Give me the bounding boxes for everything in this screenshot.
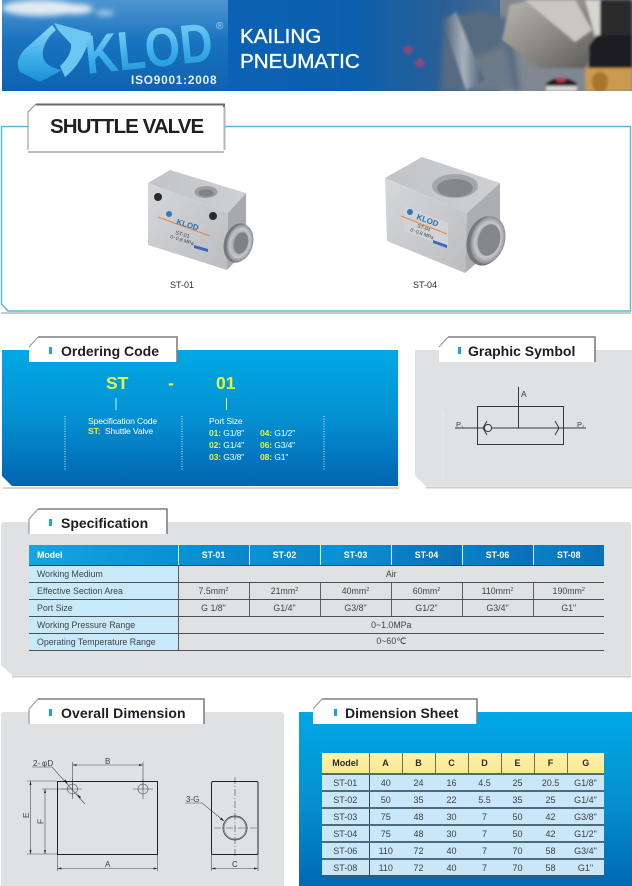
dimension table: 75 [381, 828, 391, 838]
dimension table: 110 [379, 862, 393, 872]
caption: ST-04: ST-04 [413, 280, 437, 290]
port size description: Port Size [209, 416, 243, 426]
heading: Dimension Sheet [345, 705, 459, 721]
specification table: ST-01 [202, 550, 225, 560]
dimension table: 72 [413, 846, 424, 856]
dimension table: 58 [545, 846, 556, 856]
company name [240, 25, 360, 72]
company logo: KLOD [82, 11, 216, 86]
specification code description: Specification Code [88, 416, 157, 426]
company logo [18, 11, 224, 86]
dimension table: 42 [545, 812, 556, 822]
pneumatic symbol diagram: 1 [461, 424, 464, 429]
specification table: 60mm2 [413, 586, 440, 596]
dimension drawing: 2- [33, 759, 40, 768]
port size description: 01: G1/8" [209, 428, 244, 438]
specification table: Model [37, 550, 62, 560]
dimension drawing: D [48, 759, 54, 768]
dimension table: ST-03 [333, 812, 357, 822]
dimension table: Model [332, 758, 358, 768]
code: 01: 01 [216, 373, 235, 393]
accent mark [49, 709, 52, 716]
pneumatic symbol diagram: 2 [582, 424, 585, 429]
company name: KAILING [240, 25, 321, 48]
dimension drawing: B [105, 757, 110, 766]
dimension drawing [22, 757, 258, 871]
heading: Specification [61, 515, 148, 531]
dimension table: ST-01 [333, 778, 357, 788]
dimension table: 24 [413, 778, 424, 788]
panel background [299, 712, 632, 886]
dimension table: 20.5 [542, 778, 559, 788]
dimension table: ST-06 [333, 846, 357, 856]
dimension table: ST-08 [333, 862, 357, 872]
section tab [28, 508, 168, 534]
dimension table: 50 [381, 794, 391, 804]
specification table: ST-03 [344, 550, 367, 560]
specification code description [88, 416, 157, 436]
specification table: G1/4" [273, 602, 296, 612]
dimension table: G1" [578, 862, 593, 872]
specification table: Operating Temperature Range [37, 636, 156, 646]
dimension drawing: 3-G [186, 795, 199, 804]
specification table: G1/2" [415, 602, 438, 612]
code: dash: - [168, 373, 174, 393]
dimension table: 25 [545, 794, 556, 804]
dimension table: 72 [413, 862, 424, 872]
specification table [29, 545, 604, 651]
dimension table: G3/8" [574, 812, 597, 822]
specification table: 40mm2 [342, 586, 369, 596]
port size description: 06: G3/4" [260, 440, 295, 450]
dimension table [322, 753, 604, 877]
panel: specification [1, 508, 631, 678]
heading: SHUTTLE VALVE [50, 115, 203, 138]
panel: ordering code [2, 336, 399, 489]
heading: Ordering Code [61, 343, 159, 359]
dimension table: G [582, 758, 589, 768]
dimension table: 25 [512, 778, 522, 788]
dimension table: 110 [379, 846, 393, 856]
accent mark [458, 347, 461, 354]
panel: overall dimension [1, 698, 284, 886]
dimension drawing: A [105, 860, 111, 869]
port size description: 02: G1/4" [209, 440, 244, 450]
dimension table: D [481, 758, 488, 768]
panel: product photos [0, 104, 632, 314]
dimension table: 58 [545, 862, 556, 872]
dimension table: 7 [482, 812, 487, 822]
specification table: 0~1.0MPa [371, 620, 411, 630]
dimension table: 70 [512, 862, 522, 872]
dimension table: 7 [482, 846, 487, 856]
dimension table: 7 [482, 862, 487, 872]
product: ST-04 valve photo: ST-04 [416, 223, 431, 234]
panel frame [0, 126, 632, 314]
pneumatic symbol diagram: A [521, 389, 527, 399]
header banner [2, 0, 632, 91]
accent mark [334, 709, 337, 716]
section tab [28, 698, 205, 724]
pneumatic symbol diagram [455, 387, 586, 445]
specification table: 21mm2 [271, 586, 298, 596]
specification table: G1" [561, 602, 576, 612]
dimension table: 4.5 [478, 778, 491, 788]
banner background photo collage [2, 0, 632, 91]
dimension table: 30 [446, 812, 456, 822]
dimension table: 16 [446, 778, 456, 788]
dimension table: 30 [446, 828, 456, 838]
dimension table: A [382, 758, 389, 768]
dimension table: 22 [446, 794, 456, 804]
dimension table: 48 [413, 812, 424, 822]
dimension table: G1/4" [574, 794, 597, 804]
product: ST-04 valve photo [385, 157, 506, 273]
panel: graphic symbol [415, 336, 632, 488]
company name: PNEUMATIC [240, 50, 360, 72]
accent mark [49, 347, 52, 354]
panel background [415, 350, 632, 488]
dimension table: 35 [413, 794, 424, 804]
product: ST-01 valve photo [148, 170, 254, 270]
dimension table: ST-04 [333, 828, 357, 838]
heading: Graphic Symbol [468, 343, 575, 359]
section tab [28, 336, 178, 362]
dimension drawing: C [232, 860, 238, 869]
pneumatic symbol diagram: P [456, 420, 461, 429]
heading: Overall Dimension [61, 705, 186, 721]
specification table: ST-08 [557, 550, 580, 560]
panel: dimension sheet [299, 698, 632, 886]
port size description: 08: G1" [260, 452, 288, 462]
product: ST-01 valve photo: ST-01 [174, 230, 190, 240]
specification table: 110mm2 [482, 586, 513, 596]
dimension table: 50 [512, 828, 522, 838]
port size description [209, 416, 295, 462]
product: ST-04 valve photo: KLOD [415, 212, 440, 229]
specification table: Port Size [37, 602, 73, 612]
specification table: 7.5mm2 [199, 586, 228, 596]
dimension drawing: F [36, 819, 46, 824]
panel background [2, 350, 399, 489]
pneumatic symbol diagram: P [577, 420, 582, 429]
specification table: Effective Section Area [37, 586, 123, 596]
dimension table: G1/2" [574, 828, 597, 838]
specification table: Working Pressure Range [37, 620, 135, 630]
dimension drawing: φ [42, 759, 47, 768]
dimension table: 5.5 [478, 794, 491, 804]
dimension table: E [514, 758, 520, 768]
product: ST-04 valve photo: 0~0.8 MPa [409, 227, 434, 241]
section tab [438, 336, 596, 362]
section tab [312, 698, 478, 724]
dimension table: 7 [482, 828, 487, 838]
dimension table: B [415, 758, 422, 768]
title tab [28, 104, 226, 153]
specification table: G3/8" [344, 602, 367, 612]
specification table: 190mm2 [553, 586, 585, 596]
dimension table: 75 [381, 812, 391, 822]
dimension table: 50 [512, 812, 522, 822]
dimension table: G1/8" [574, 778, 597, 788]
specification table: G 1/8" [201, 602, 226, 612]
specification table: Air [386, 568, 397, 578]
specification table: ST-04 [415, 550, 438, 560]
port size description: 04: G1/2" [260, 428, 295, 438]
port size description: 03: G3/8" [209, 452, 244, 462]
specification table: ST-02 [273, 550, 296, 560]
dimension table: 35 [512, 794, 522, 804]
product: ST-01 valve photo: 0~0.8 MPa [169, 234, 195, 247]
code: ST: ST [106, 373, 128, 393]
accent mark [49, 519, 52, 526]
dimension table: 48 [413, 828, 424, 838]
panel background [1, 712, 284, 886]
dimension table: 40 [446, 862, 456, 872]
specification table: ST-06 [486, 550, 509, 560]
panel background [1, 522, 631, 678]
dimension drawing: E [22, 813, 31, 818]
company logo: ® [216, 21, 224, 32]
dimension table: 70 [512, 846, 522, 856]
dimension table: G3/4" [574, 846, 597, 856]
specification table: 0~60℃ [376, 636, 406, 646]
specification code description: ST: Shuttle Valve [88, 426, 153, 436]
dimension table: ST-02 [333, 794, 357, 804]
specification table: G3/4" [486, 602, 509, 612]
specification table: Working Medium [37, 568, 103, 578]
dimension table: F [548, 758, 553, 768]
caption: ST-01: ST-01 [170, 280, 194, 290]
dimension table: 40 [381, 778, 391, 788]
product: ST-01 valve photo: KLOD [175, 217, 200, 233]
dimension table: 40 [446, 846, 456, 856]
dimension table: C [448, 758, 455, 768]
certification text: ISO9001:2008 [131, 73, 217, 87]
dimension table: 42 [545, 828, 556, 838]
